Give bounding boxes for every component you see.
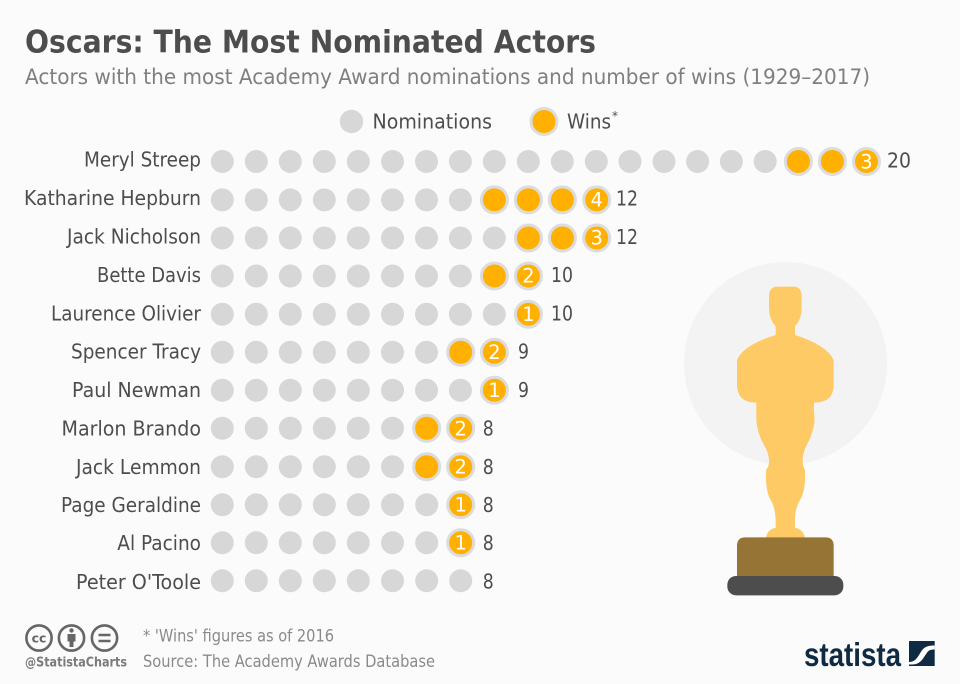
- row: Jack Lemmon: 2: [454, 455, 467, 478]
- row: Paul Newman: [72, 377, 529, 403]
- row: Laurence Olivier: 10: [551, 301, 573, 325]
- row: Jack Lemmon: 8: [483, 455, 494, 479]
- row: Jack Nicholson: [65, 224, 638, 251]
- subtitle: Actors with the most Academy Award nominations and number of wins (1929–2017): [25, 65, 870, 89]
- legend: [340, 108, 618, 134]
- row: Laurence Olivier: 1: [522, 303, 535, 326]
- icons: Creative Commons licence: [26, 625, 117, 651]
- row: Meryl Streep: [84, 148, 911, 174]
- row: Katharine Hepburn: 12: [616, 186, 638, 210]
- legend: wins: Wins: [567, 110, 611, 134]
- row: Peter O'Toole: 8: [483, 569, 494, 593]
- icon: no derivatives: [92, 625, 117, 651]
- icon: attribution: [59, 625, 84, 651]
- row: Bette Davis: Bette Davis: [97, 263, 201, 287]
- row: Paul Newman: 1: [488, 379, 501, 402]
- row: Bette Davis: [97, 263, 573, 289]
- icon: Oscar statue: [727, 287, 843, 595]
- dot chart: [24, 148, 911, 594]
- icon: statista mark: [909, 641, 935, 666]
- row: Al Pacino: 8: [483, 531, 494, 555]
- row: Al Pacino: [117, 530, 494, 556]
- row: Laurence Olivier: [51, 301, 573, 327]
- background circle behind statue: [684, 262, 887, 465]
- row: Jack Lemmon: Jack Lemmon: [74, 455, 201, 479]
- source: Source: The Academy Awards Database: [143, 652, 435, 671]
- legend: nominations: Nominations: [372, 110, 492, 134]
- row: Page Geraldine: [61, 492, 494, 518]
- row: Page Geraldine: Page Geraldine: [61, 493, 201, 517]
- legend: wins: *: [612, 109, 618, 123]
- row: Bette Davis: 2: [522, 265, 535, 288]
- row: Marlon Brando: [62, 415, 494, 441]
- row: Spencer Tracy: Spencer Tracy: [71, 340, 201, 364]
- row: Spencer Tracy: 9: [518, 340, 529, 364]
- row: Peter O'Toole: [76, 569, 494, 594]
- row: Meryl Streep: 3: [860, 150, 873, 173]
- row: Spencer Tracy: [71, 339, 529, 365]
- legend: wins: [531, 108, 618, 134]
- row: Katharine Hepburn: [24, 186, 638, 213]
- row: Page Geraldine: 1: [454, 494, 467, 517]
- row: Meryl Streep: Meryl Streep: [84, 148, 201, 172]
- row: Jack Lemmon: [74, 454, 494, 480]
- row: Jack Nicholson: Jack Nicholson: [65, 224, 201, 248]
- row: Laurence Olivier: Laurence Olivier: [51, 301, 202, 325]
- row: Bette Davis: 10: [551, 263, 573, 287]
- icon: cc: cc: [32, 630, 46, 646]
- row: Paul Newman: Paul Newman: [72, 378, 201, 402]
- row: Katharine Hepburn: Katharine Hepburn: [24, 186, 201, 210]
- row: Spencer Tracy: 2: [488, 341, 501, 364]
- credit handle: @StatistaCharts: [25, 656, 127, 670]
- row: Al Pacino: 1: [454, 532, 467, 555]
- row: Jack Nicholson: 3: [590, 227, 603, 250]
- row: Peter O'Toole: Peter O'Toole: [76, 570, 201, 594]
- row: Katharine Hepburn: 4: [590, 188, 603, 212]
- footnote: * 'Wins' figures as of 2016: [143, 627, 334, 646]
- row: Paul Newman: 9: [518, 378, 529, 402]
- row: Marlon Brando: Marlon Brando: [62, 416, 201, 440]
- title: Oscars: The Most Nominated Actors: [25, 25, 596, 61]
- row: Jack Nicholson: 12: [616, 225, 638, 249]
- row: Marlon Brando: 2: [454, 417, 467, 440]
- row: Al Pacino: Al Pacino: [117, 531, 201, 555]
- row: Page Geraldine: 8: [483, 493, 494, 517]
- row: Meryl Streep: 20: [887, 148, 911, 172]
- row: Marlon Brando: 8: [483, 417, 494, 441]
- statista logo: statista: [804, 636, 902, 673]
